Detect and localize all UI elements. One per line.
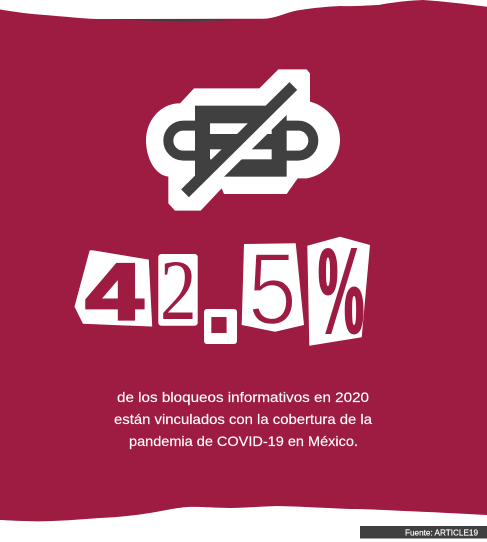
icon halo: [146, 69, 340, 211]
source bar: [360, 526, 487, 538]
statistic: 42.5% cut-out letters: [75, 224, 370, 358]
icon diagonal gap: [205, 93, 293, 177]
icon upper window: [210, 123, 272, 134]
tile: digit 5: 5: [248, 233, 297, 347]
tile: percent sign: %: [314, 224, 368, 358]
description line 3: pandemia de COVID-19 en México.: [129, 433, 358, 449]
icon right link loop: [270, 126, 313, 156]
tile: digit 2: 2: [160, 244, 197, 338]
icon left link loop: [168, 126, 212, 156]
icon: blocked link symbol: [146, 69, 340, 211]
thin dark sliver at top edge: [110, 19, 256, 22]
source text: Fuente: ARTICLE19: [405, 528, 479, 538]
description line 2: están vinculados con la cobertura de la: [114, 411, 372, 427]
description line 1: de los bloqueos informativos en 2020: [117, 389, 369, 405]
tile: digit 4: 4: [86, 247, 144, 336]
icon lower window: [210, 149, 272, 159]
text block: description: [114, 389, 372, 449]
icon diagonal slash: [185, 86, 293, 193]
icon central block: [195, 106, 287, 177]
tile: decimal point: .: [204, 235, 234, 356]
